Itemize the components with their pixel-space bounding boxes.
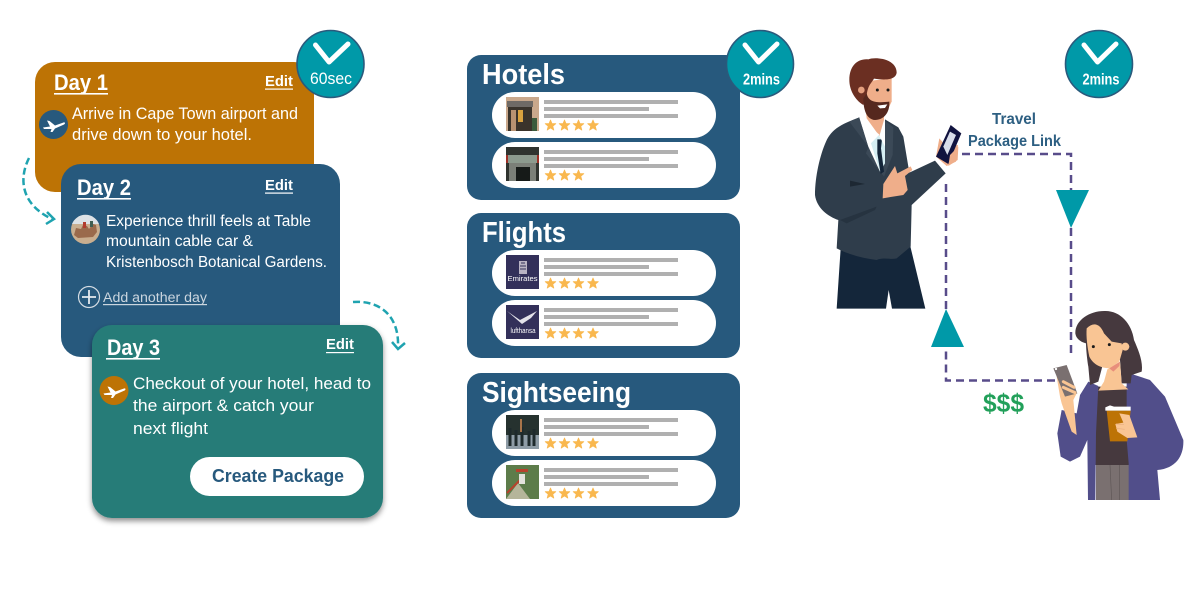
edit link: day 3: Edit <box>326 336 354 353</box>
panel: day 1 <box>35 62 314 192</box>
badge: 60sec <box>297 30 364 98</box>
text: day 1 description: Arrive in Cape Town airport and <box>72 105 298 123</box>
button: create package <box>190 457 364 496</box>
text: day 2 description: Experience thrill feels at Table <box>106 213 311 230</box>
label: travel package link: Package Link <box>968 133 1061 150</box>
edit link: day 2: Edit <box>265 177 293 194</box>
listing: hotel two <box>492 142 716 188</box>
badge: hotels 2mins <box>726 30 794 98</box>
listing: sight two <box>492 460 716 506</box>
heading: day 1: Day 1 <box>54 70 108 95</box>
panel: flights <box>467 213 740 358</box>
text: day 2 description: Kristenbosch Botanical Gardens. <box>106 254 327 271</box>
heading: sightseeing: Sightseeing <box>482 377 631 409</box>
text: day 3 description: the airport & catch your <box>133 396 314 415</box>
badge: payment 2mins <box>1066 30 1132 98</box>
panel: day 2 <box>61 164 340 357</box>
add another day link: Add another day <box>103 290 207 305</box>
text: day 2 description: mountain cable car & <box>106 233 254 250</box>
listing: sight one <box>492 410 716 456</box>
arrow: day 2 to day 3 <box>353 302 405 349</box>
listing: lufthansa: lufthansa <box>510 328 536 335</box>
icon: plane blue <box>39 110 68 139</box>
label: money: $$$ <box>983 388 1025 418</box>
edit link: day 1: Edit <box>265 73 293 90</box>
panel: day 3 <box>92 325 383 518</box>
heading: day 3: Day 3 <box>107 335 160 360</box>
listing: lufthansa <box>492 300 716 346</box>
listing: emirates: Emirates <box>508 274 538 283</box>
badge: 60sec: 60sec <box>310 70 352 88</box>
label: travel package link <box>968 111 1061 150</box>
panel: hotels <box>467 55 740 200</box>
arrow: day 1 to day 2 <box>23 158 54 224</box>
heading: day 2: Day 2 <box>77 175 131 200</box>
heading: flights: Flights <box>482 217 566 249</box>
badge: hotels 2mins: 2mins <box>743 72 780 88</box>
arrow: payment from customer to agent <box>931 183 1055 380</box>
add another day link <box>78 286 207 308</box>
text: day 2 description <box>106 213 327 271</box>
illustration: customer <box>1053 311 1183 500</box>
heading: hotels: Hotels <box>482 59 565 91</box>
label: travel package link: Travel <box>992 111 1036 128</box>
text: day 1 description: drive down to your hotel. <box>72 126 252 144</box>
text: day 3 description: next flight <box>133 419 208 438</box>
listing: emirates <box>492 250 716 296</box>
arrow: link from agent to customer <box>962 154 1089 353</box>
panel: sightseeing <box>467 373 740 518</box>
text: day 1 description <box>72 105 298 144</box>
icon: camel photo <box>71 215 100 244</box>
listing: hotel one <box>492 92 716 138</box>
text: day 3 description: Checkout of your hotel, head to <box>133 374 371 393</box>
illustration: travel agent <box>815 58 961 309</box>
text: day 3 description <box>133 374 371 438</box>
button: create package: Create Package <box>212 465 344 486</box>
badge: payment 2mins: 2mins <box>1082 72 1120 88</box>
icon: plane orange <box>100 376 128 405</box>
